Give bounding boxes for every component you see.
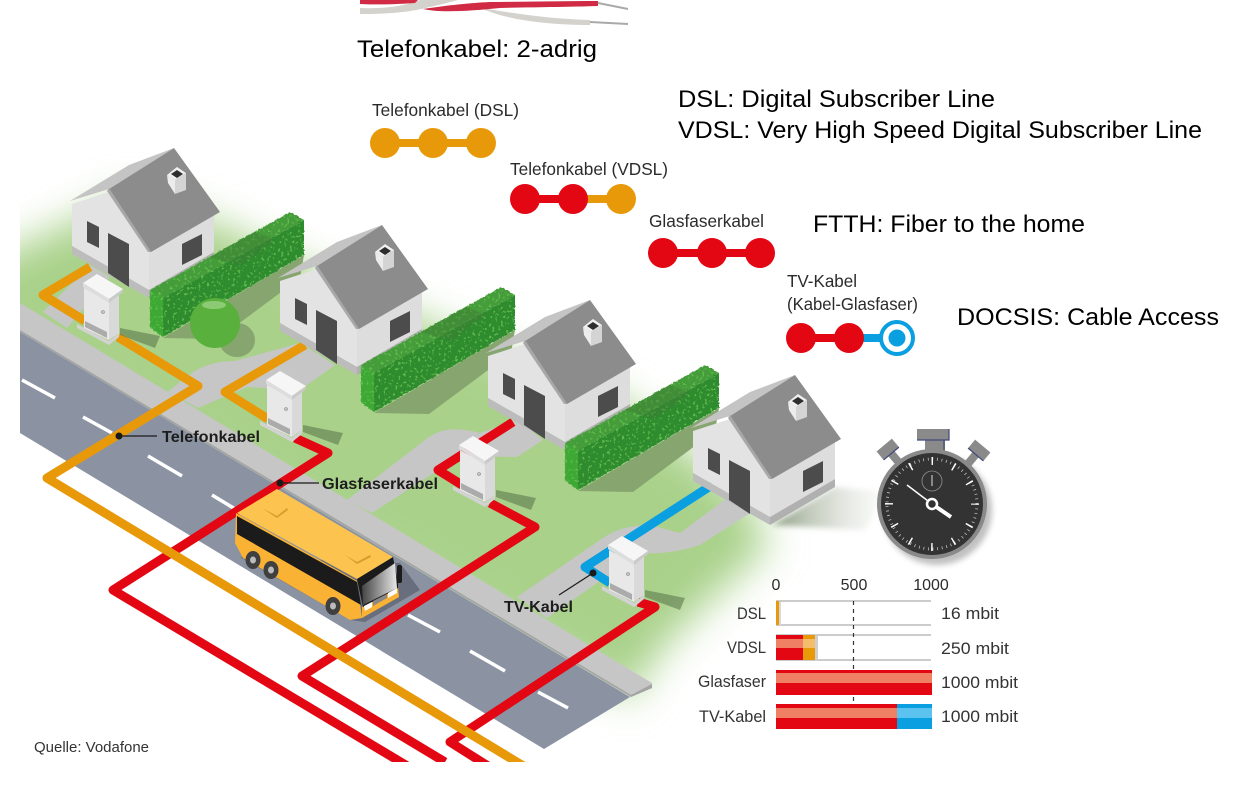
row: TV-Kabel [776, 704, 932, 729]
text block: VDSL definition: VDSL: Very High Speed Digital Subscriber Line [678, 117, 1202, 144]
row values: 16 mbit [941, 605, 999, 623]
bar chart: speeds [698, 577, 1018, 729]
house 3 [486, 300, 636, 450]
legend: TV-Kabel: TV-Kabel [787, 271, 857, 291]
lawn ground [0, 195, 770, 700]
axis labels: 500 [841, 577, 867, 594]
road markings [22, 380, 568, 708]
row labels: DSL [737, 605, 766, 623]
cable: red fibre lines [113, 422, 655, 770]
callout: TV-Kabel [504, 570, 596, 616]
row labels [698, 605, 766, 726]
row labels: VDSL [727, 639, 766, 657]
legend: TV-Kabel [786, 271, 918, 354]
text block: FTTH definition: FTTH: Fiber to the home [813, 211, 1085, 238]
cable: orange telephone lines [43, 267, 530, 770]
grid [776, 601, 931, 660]
icon: stopwatch [877, 429, 992, 565]
house 4 shadow [772, 487, 885, 530]
house 1 [70, 148, 220, 298]
row: Glasfaser [776, 670, 932, 695]
bush shadow [219, 323, 255, 357]
sidewalk [20, 303, 652, 697]
legend: Telefonkabel DSL: Telefonkabel (DSL) [372, 100, 519, 120]
row values [941, 605, 1018, 726]
road [20, 332, 630, 749]
panel: cable photo [360, 0, 628, 25]
hedge 2 [361, 287, 515, 414]
row: DSL [776, 601, 781, 625]
legend: Telefonkabel VDSL: Telefonkabel (VDSL) [510, 159, 668, 179]
legend: Glasfaserkabel: Glasfaserkabel [649, 211, 764, 231]
row values: 1000 mbit [941, 708, 1018, 726]
callout: Glasfaserkabel: Glasfaserkabel [322, 476, 438, 493]
driveways [43, 265, 750, 618]
source note: Quelle: Vodafone [34, 739, 149, 756]
street cabinet 2 [260, 371, 343, 445]
text block: DSL definition: DSL: Digital Subscriber Line [678, 86, 995, 113]
axis labels: 0 [772, 577, 781, 594]
row values: 250 mbit [941, 640, 1009, 658]
axis labels [772, 577, 949, 594]
hedge 3 [565, 365, 719, 492]
row labels: Glasfaser [698, 673, 766, 691]
street cabinet 4 [602, 536, 685, 610]
legend: Telefonkabel VDSL [510, 159, 668, 214]
illustration: neighbourhood scene [0, 148, 885, 770]
bus shadow [240, 557, 420, 622]
callout: Glasfaserkabel [276, 478, 437, 489]
row labels: TV-Kabel [699, 708, 766, 726]
house 2 [278, 225, 428, 375]
legend: Glasfaserkabel [648, 211, 775, 268]
cable: blue TV line [585, 485, 712, 583]
legend: Telefonkabel DSL [370, 100, 519, 158]
axis labels: 1000 [913, 577, 949, 594]
street cabinet 1 [77, 274, 160, 348]
heading: Telefonkabel 2-adrig: Telefonkabel: 2-adrig [357, 36, 597, 63]
legend: TV-Kabel: (Kabel-Glasfaser) [787, 294, 918, 314]
bus [235, 489, 402, 620]
callout: TV-Kabel: TV-Kabel [504, 599, 573, 616]
callout: Telefonkabel: Telefonkabel [162, 429, 260, 446]
bush [190, 298, 240, 348]
callout: Telefonkabel [116, 430, 259, 442]
house 4 [691, 375, 841, 525]
text block: DOCSIS definition: DOCSIS: Cable Access [957, 304, 1219, 331]
row values: 1000 mbit [941, 674, 1018, 692]
row: VDSL [776, 635, 818, 660]
hedge 1 [150, 212, 304, 339]
street cabinet 3 [453, 436, 536, 510]
